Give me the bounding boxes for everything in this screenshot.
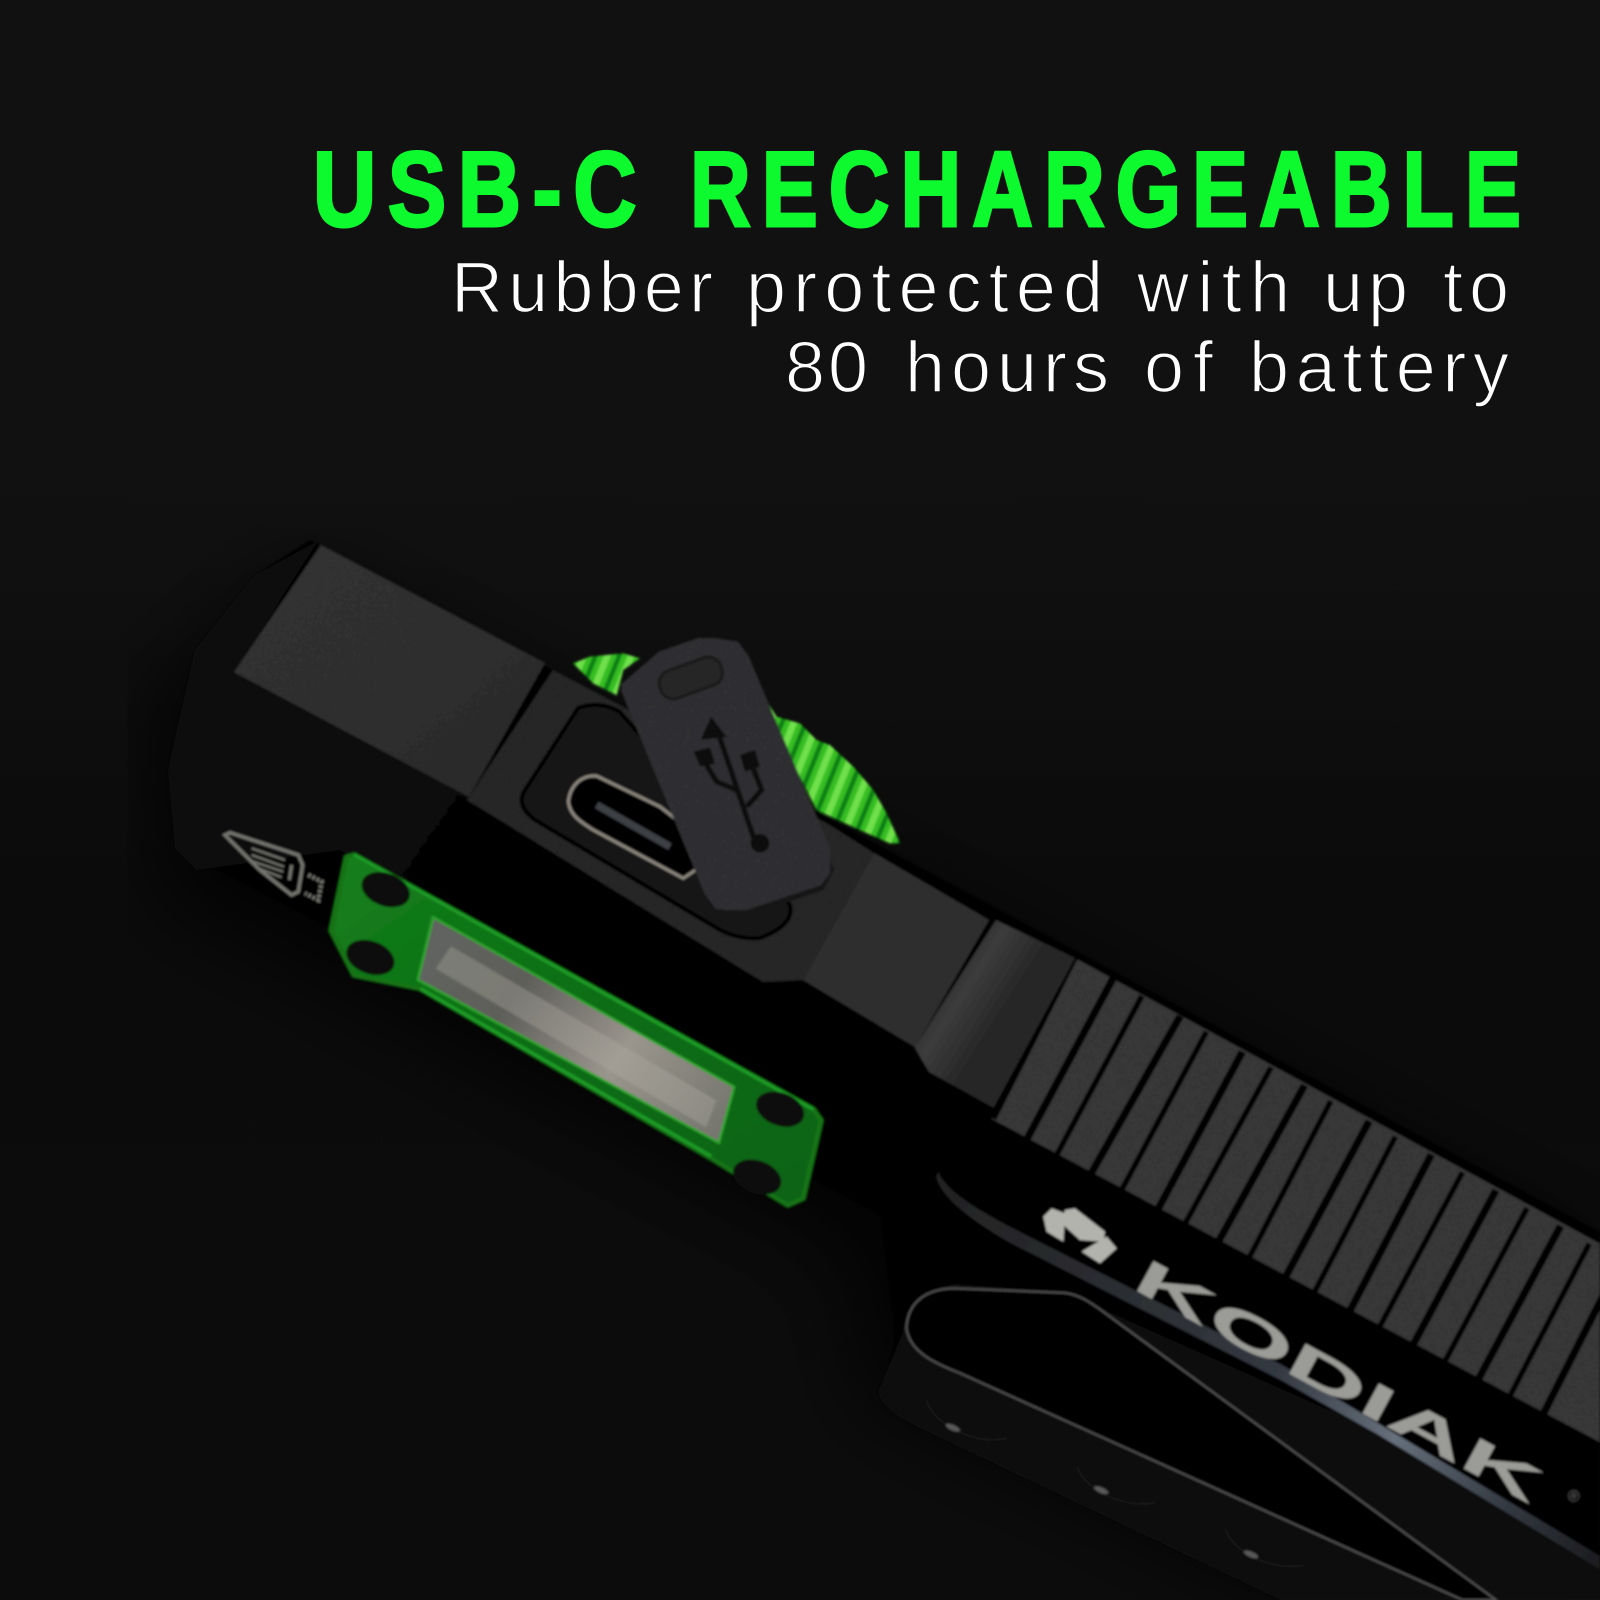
- spring clip outline: [906, 1288, 1496, 1600]
- flashlight shadow: [140, 560, 1600, 1600]
- ridged grip: [991, 958, 1600, 1442]
- registered mark: ®: [1564, 1487, 1583, 1507]
- flashlight product photo: [140, 540, 1600, 1600]
- lower clip plate: [879, 1284, 1600, 1600]
- brand name on body: KODIAK: [1125, 1248, 1552, 1514]
- charging port collar: [467, 670, 874, 982]
- subtitle line 2: [785, 328, 1509, 408]
- green knurled dial, right part: [768, 703, 900, 843]
- LED window: [418, 917, 734, 1143]
- subtitle line 1: with: [1136, 248, 1290, 328]
- top face near end: [234, 545, 545, 797]
- green knurled dial, left part: [573, 653, 900, 843]
- window inner glare: [436, 946, 716, 1127]
- USB symbol: [697, 722, 767, 850]
- grip section: [879, 920, 1600, 1600]
- frame screws: [339, 865, 811, 1202]
- clip holes: [927, 1400, 1305, 1566]
- cap pill indent: [655, 653, 726, 703]
- title: USB-C: [313, 129, 648, 249]
- flashlight body: [168, 540, 1600, 1600]
- bear logo: [1043, 1208, 1117, 1263]
- top face after port: [803, 853, 989, 1047]
- frame highlight edge: [354, 855, 813, 1156]
- subtitle line 1: protected: [746, 248, 1103, 328]
- lower left body side: [190, 672, 560, 930]
- subtitle line 1: [451, 248, 1509, 328]
- subtitle: [451, 248, 1509, 408]
- LED heat warning icon: [225, 833, 322, 900]
- green LED frame: [331, 855, 821, 1205]
- subtitle line 2: 80: [785, 328, 868, 408]
- rubber cap: [622, 638, 834, 918]
- subtitle line 2: of: [1144, 328, 1214, 408]
- subtitle line 1: up: [1323, 248, 1408, 328]
- clip sheen: [936, 1172, 1600, 1570]
- subtitle line 1: to: [1443, 248, 1509, 328]
- title: [313, 129, 1532, 249]
- end cap: [168, 541, 318, 870]
- subtitle line 2: hours: [905, 328, 1109, 408]
- cap shadow lip: [707, 850, 834, 918]
- subtitle line 2: battery: [1249, 328, 1509, 408]
- recess around USB-C port: [522, 705, 791, 938]
- rounded shoulder: [915, 920, 1075, 1108]
- port tongue: [597, 805, 670, 847]
- subtitle line 1: Rubber: [451, 248, 713, 328]
- USB-C port: [568, 776, 720, 878]
